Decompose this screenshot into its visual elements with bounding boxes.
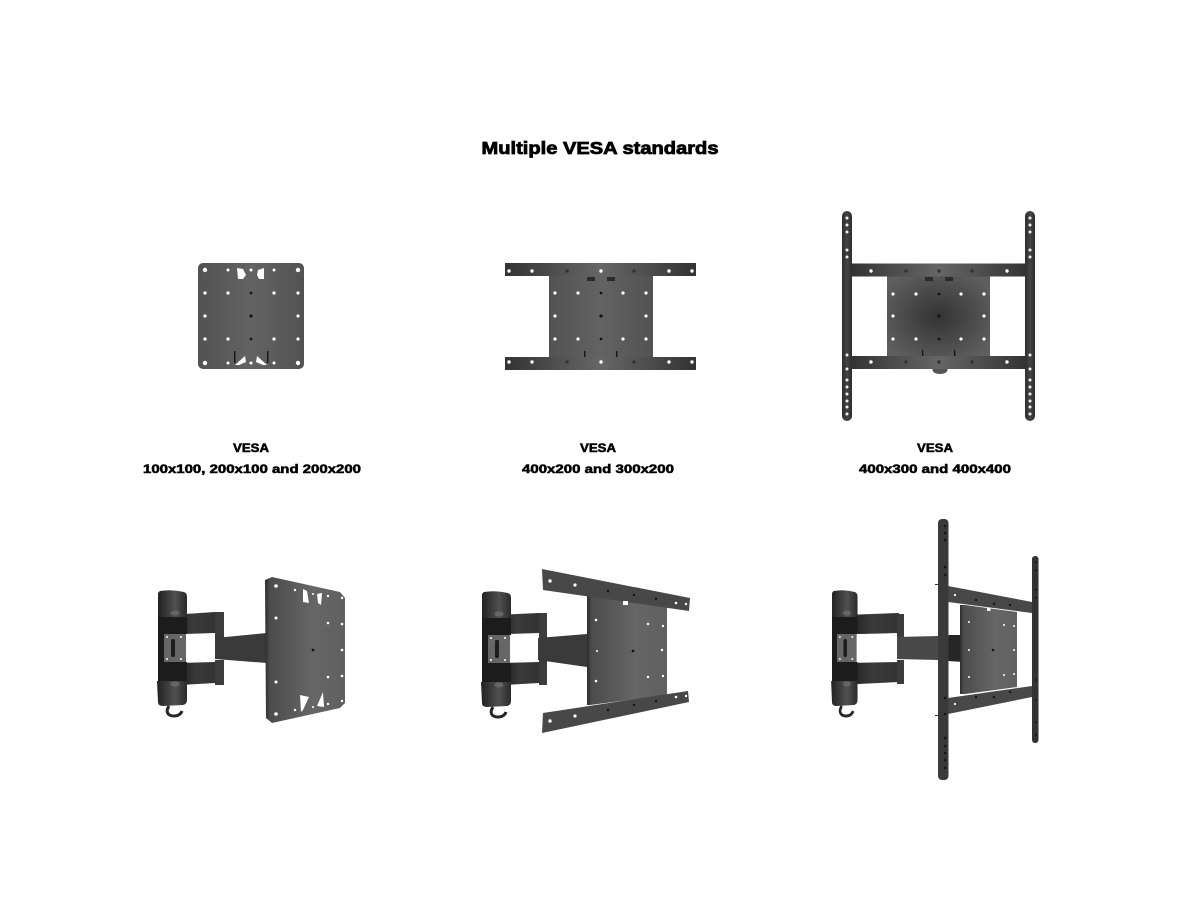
- plate with bars front view: VESA 400x200 and 300x200: [505, 263, 696, 370]
- caption: middle column: [522, 441, 674, 476]
- caption: left column: [143, 441, 361, 476]
- caption: middle column: 400x200 and 300x200: [522, 462, 674, 476]
- caption: right column: VESA: [917, 441, 953, 455]
- plate with bars and uprights front view: VESA 400x300 and 400x400: [842, 211, 1035, 421]
- caption: left column: VESA: [233, 441, 269, 455]
- arm mount with bars and uprights, angled view: [831, 519, 1038, 780]
- arm mount with small plate, angled view: [157, 577, 345, 723]
- caption: middle column: VESA: [580, 441, 616, 455]
- plate front view: VESA 100x100 to 200x200: [198, 263, 304, 369]
- caption: left column: 100x100, 200x100 and 200x200: [143, 462, 361, 476]
- caption: right column: [859, 441, 1011, 476]
- arm mount with bars, angled view: [481, 569, 690, 733]
- title: Multiple VESA standards: [482, 138, 719, 158]
- caption: right column: 400x300 and 400x400: [859, 462, 1011, 476]
